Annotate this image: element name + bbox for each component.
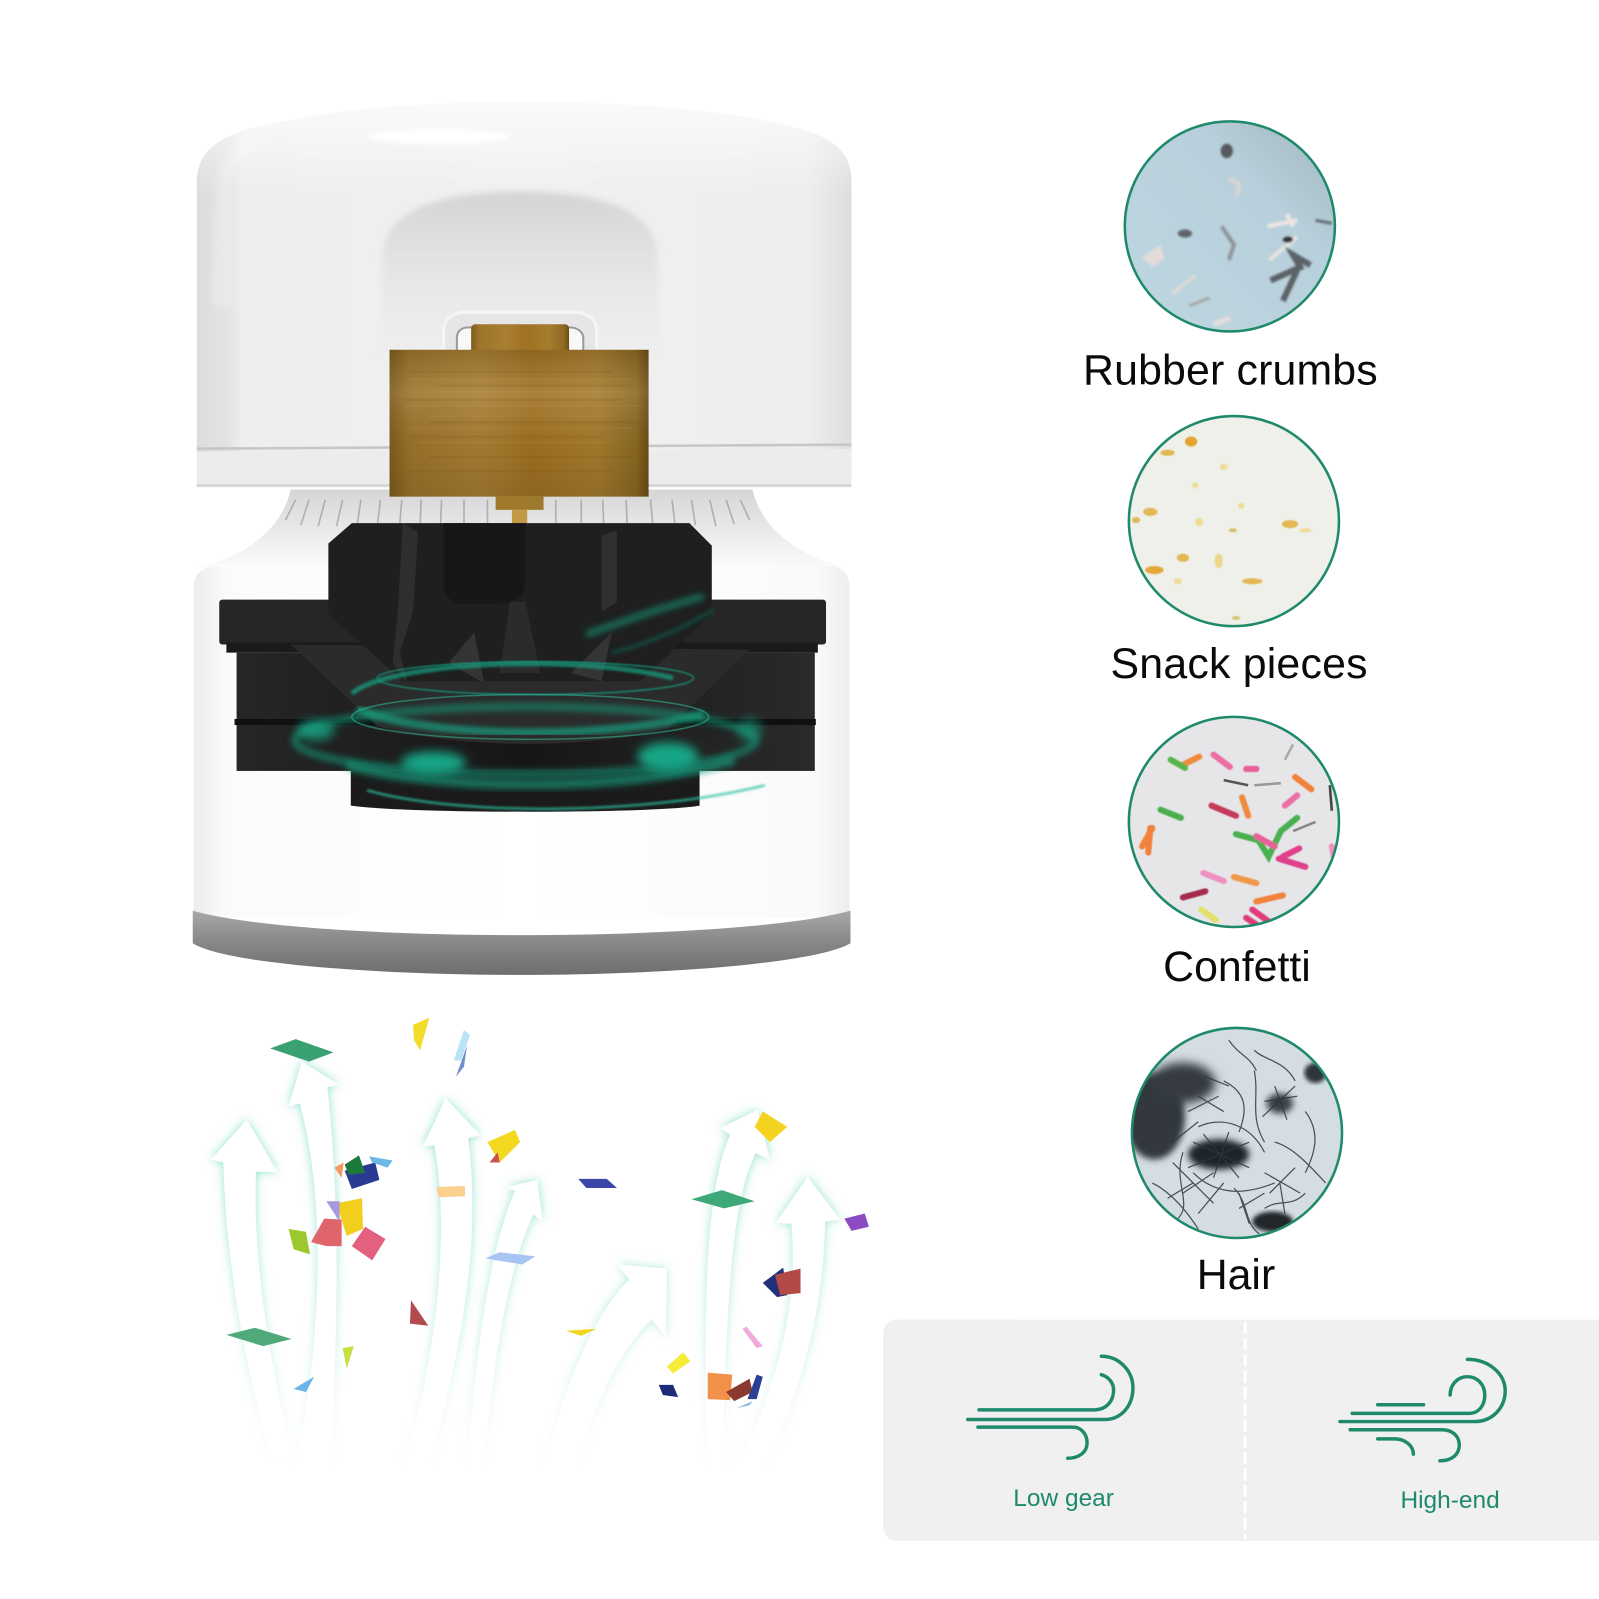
- small slot: [444, 312, 597, 355]
- debris circle: confetti: [1122, 714, 1346, 938]
- black fan: [328, 523, 712, 685]
- green air vortex: [295, 597, 765, 809]
- product cutaway illustration: [193, 102, 852, 975]
- debris circle: hair: [1130, 1026, 1344, 1240]
- label: high-end: High-end: [1400, 1487, 1500, 1514]
- icon: low gear wind: [968, 1356, 1133, 1458]
- debris circle: rubber crumbs: [1122, 118, 1338, 334]
- cap recess arch: [382, 192, 658, 352]
- label: low gear: Low gear: [1013, 1485, 1114, 1512]
- top cap: [197, 102, 852, 487]
- arrow 7: [758, 1174, 844, 1420]
- arrow 5: [557, 1259, 673, 1419]
- label: rubber crumbs: Rubber crumbs: [1083, 346, 1378, 394]
- lower white body: [194, 564, 849, 918]
- arrow 4: [470, 1175, 548, 1420]
- arrow 1: [208, 1116, 285, 1420]
- black housing flange: [219, 600, 826, 812]
- grey neck with vents: [199, 489, 844, 567]
- arrow 6: [706, 1110, 770, 1479]
- label: confetti: Confetti: [1163, 943, 1311, 991]
- brass motor: [390, 350, 649, 523]
- panel: fan speed gears: [883, 1320, 1599, 1541]
- debris circle: snack pieces: [1122, 408, 1346, 632]
- grey base ring: [193, 911, 850, 975]
- confetti particles: [226, 1018, 869, 1408]
- arrow 3: [416, 1095, 483, 1420]
- icon: high-end wind: [1340, 1359, 1505, 1461]
- label: snack pieces: Snack pieces: [1111, 640, 1368, 688]
- rising air arrows: [208, 1059, 844, 1420]
- label: hair: Hair: [1197, 1251, 1275, 1299]
- arrow 2: [289, 1062, 340, 1468]
